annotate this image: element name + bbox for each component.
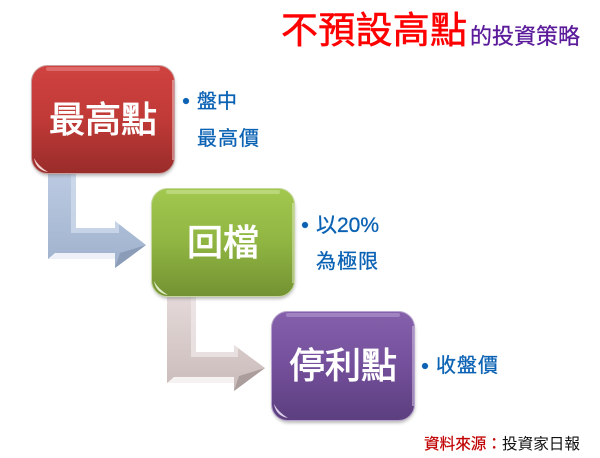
text block: intraday high: 最高價 bbox=[197, 127, 259, 150]
arrow: middle step to bottom step bbox=[167, 295, 265, 391]
heading: highest point: 最高點 bbox=[49, 99, 157, 140]
title: 的投資策略 bbox=[470, 24, 580, 49]
panel: pullback bbox=[152, 188, 295, 299]
heading: take profit: 停利點 bbox=[289, 345, 397, 386]
source note: 資料來源： bbox=[424, 435, 502, 453]
arrow: top step to middle step bbox=[48, 172, 146, 268]
text block: intraday high: 盤中 bbox=[197, 90, 237, 113]
title: 不預設高點 bbox=[281, 10, 467, 51]
source note: 投資家日報 bbox=[502, 435, 580, 453]
panel: highest point bbox=[32, 66, 175, 176]
panel: take profit bbox=[272, 312, 415, 423]
text block: 20% limit: 為極限 bbox=[316, 250, 378, 273]
text block: closing price: 收盤價 bbox=[436, 354, 498, 377]
source note bbox=[424, 435, 580, 453]
text block: 20% limit: 以20% bbox=[316, 214, 379, 237]
title bbox=[281, 10, 580, 51]
text block: 20% limit bbox=[302, 214, 379, 273]
text block: intraday high bbox=[183, 90, 259, 150]
heading: pullback: 回檔 bbox=[187, 222, 259, 263]
